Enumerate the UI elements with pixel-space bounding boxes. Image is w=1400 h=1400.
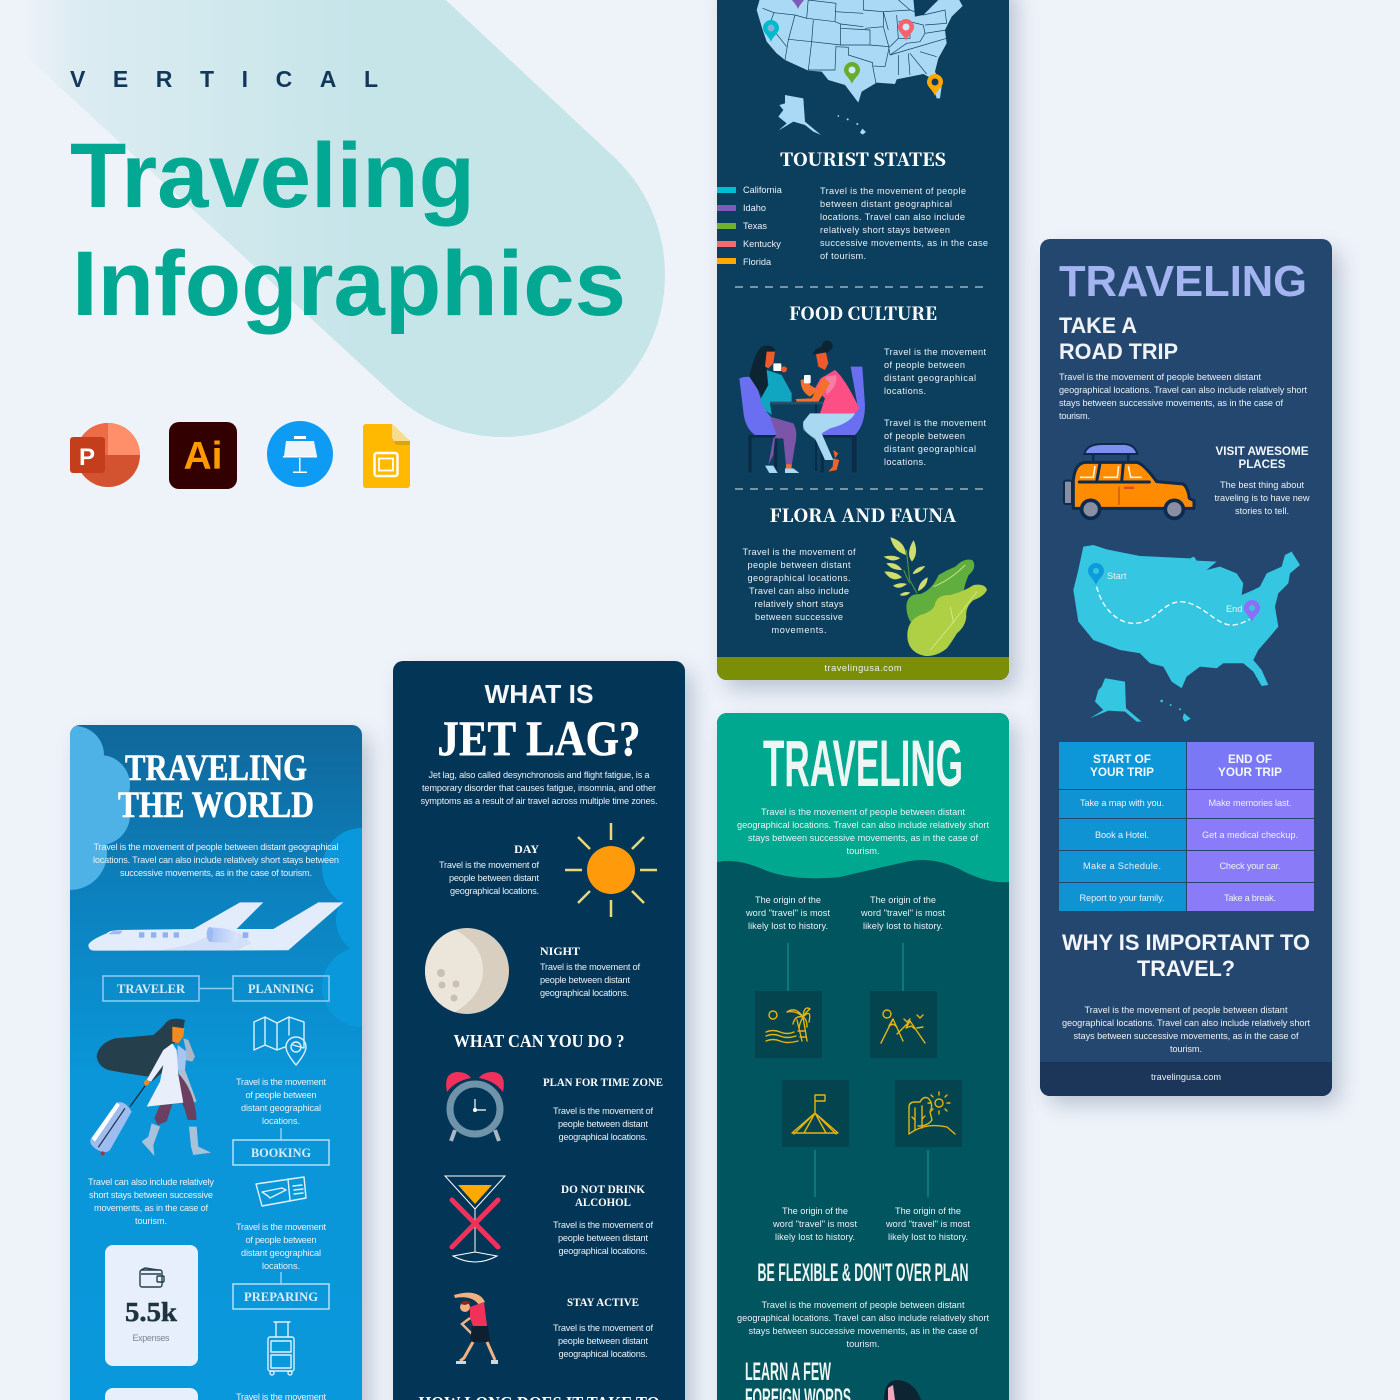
eyebrow: VERTICAL: VERTICAL <box>70 66 378 92</box>
table: start and end of your trip: Check your car. <box>1220 861 1280 871</box>
text: stay active: Travel is the movement of <box>553 1323 653 1333</box>
text: origin top left: likely lost to history. <box>748 921 828 931</box>
text: plan for time zone: PLAN FOR TIME ZONE <box>543 1077 663 1089</box>
text: visit paragraph <box>1214 482 1310 514</box>
text: tourist paragraph: of tourism. <box>820 251 866 261</box>
flow chart boxes: TRAVELER <box>117 981 186 996</box>
text: be flexible paragraph: Travel is the movement of people between distant <box>762 1300 965 1310</box>
table: start and end of your trip: Report to your family. <box>1080 893 1164 903</box>
flow box: preparing: PREPARING <box>244 1289 318 1304</box>
footer bar <box>1040 1062 1332 1096</box>
text: intro paragraph: temporary disorder that causes fatigue, insomnia, and other <box>422 783 656 793</box>
subheading: visit awesome places <box>1216 446 1308 468</box>
table: start and end of your trip: Take a break. <box>1224 893 1276 903</box>
heading: learn a few foreign words <box>745 1358 851 1400</box>
text: plan for time zone: Travel is the movement of <box>553 1106 653 1116</box>
flow box: preparing <box>233 1284 329 1309</box>
table: start and end of your trip: Take a map with you. <box>1080 798 1164 808</box>
text: origin bottom left <box>772 1206 857 1242</box>
text: intro paragraph: tourism. <box>1059 411 1090 421</box>
legend: states: California <box>743 185 783 195</box>
text: stay active: geographical locations. <box>558 1349 648 1359</box>
text: tourist paragraph: successive movements, as in the case <box>820 238 988 248</box>
table: start and end of your trip: START OF <box>1093 754 1151 766</box>
icon: tree and sun <box>895 1080 962 1147</box>
flow chart boxes <box>103 976 329 1001</box>
text: intro paragraph: Jet lag, also called desynchronosis and flight fatigue, is a <box>428 770 650 780</box>
illustration: orange car <box>1064 444 1194 518</box>
text: right column first paragraph: Travel is the movement <box>236 1077 326 1087</box>
heading: what can you do: WHAT CAN YOU DO ? <box>454 1031 624 1051</box>
text: intro paragraph: geographical locations. Travel can also include relatively short <box>737 820 989 830</box>
subheading: take a road trip: TAKE A <box>1059 313 1137 338</box>
text: do not drink alcohol <box>553 1184 653 1256</box>
text: booking paragraph: of people between <box>246 1235 316 1245</box>
text: flora paragraph: geographical locations. <box>748 573 850 583</box>
text: tourist paragraph: between distant geographical <box>820 199 952 209</box>
text: day <box>439 842 539 896</box>
text: intro paragraph <box>1059 372 1307 421</box>
icon: Google Slides <box>363 424 410 488</box>
flow box: booking: BOOKING <box>251 1145 311 1160</box>
table: start and end of your trip: Get a medical checkup. <box>1202 830 1298 840</box>
USA route map: End <box>1226 604 1242 614</box>
icon: Illustrator: Ai <box>184 435 222 478</box>
table: start and end of your trip: YOUR TRIP <box>1090 767 1154 779</box>
text: origin top right <box>860 895 945 931</box>
legend: states: Texas <box>743 221 767 231</box>
text: be flexible paragraph: tourism. <box>846 1339 880 1349</box>
text: food paragraphs <box>884 347 986 467</box>
text: food paragraphs: locations. <box>884 386 926 396</box>
panel: teal traveling card <box>717 713 1017 1400</box>
text: food paragraphs: Travel is the movement <box>884 347 986 357</box>
heading: flora and fauna: FLORA AND FAUNA <box>770 502 957 528</box>
table: start and end of your trip: YOUR TRIP <box>1218 767 1282 779</box>
text: stay active <box>553 1297 653 1359</box>
text: do not drink alcohol: ALCOHOL <box>575 1197 631 1209</box>
icon: crossed-out martini <box>445 1176 505 1262</box>
illustration: two women at a cafe table <box>739 341 865 473</box>
icon: moon <box>425 928 509 1014</box>
text: origin top left: word "travel" is most <box>745 908 830 918</box>
text: origin top right: likely lost to history. <box>863 921 943 931</box>
icon: alarm clock <box>446 1072 504 1141</box>
panel: jet lag card <box>393 661 693 1400</box>
text: food paragraphs: of people between <box>884 360 965 370</box>
icon: PowerPoint: P <box>79 444 95 471</box>
stat card: expenses <box>105 1245 198 1366</box>
stat card: second, cropped <box>105 1388 198 1400</box>
text: stay active: STAY ACTIVE <box>567 1297 639 1309</box>
legend: states: Kentucky <box>743 239 781 249</box>
text: origin bottom left: likely lost to history. <box>775 1232 855 1242</box>
heading: food culture: FOOD CULTURE <box>789 300 937 326</box>
text: intro paragraph: Travel is the movement of people between distant geographical <box>94 842 338 852</box>
text: flora paragraph: Travel is the movement of <box>742 547 856 557</box>
text: night: NIGHT <box>540 944 580 958</box>
subheading: take a road trip: ROAD TRIP <box>1059 339 1178 364</box>
text: be flexible paragraph <box>737 1300 989 1349</box>
text: left paragraph: short stays between successive <box>89 1190 213 1200</box>
text: flora paragraph: people between distant <box>748 560 851 570</box>
icon: mountains <box>870 991 937 1058</box>
icon: Illustrator <box>169 422 237 489</box>
heading: why is important to travel <box>1062 934 1310 976</box>
icon: sun <box>565 823 657 917</box>
icon: PowerPoint <box>70 423 140 487</box>
text: plan for time zone <box>543 1077 663 1142</box>
footer bar: travelingusa.com <box>824 663 902 673</box>
icon: suitcase <box>268 1322 294 1375</box>
text: be flexible paragraph: geographical locations. Travel can also include relatively short <box>737 1313 989 1323</box>
text: plan for time zone: people between distant <box>558 1119 648 1129</box>
table: start and end of your trip: Make a Schedule. <box>1083 861 1161 871</box>
text: day: people between distant <box>449 873 539 883</box>
text: origin bottom right: The origin of the <box>895 1206 961 1216</box>
text: origin bottom right: word "travel" is most <box>885 1219 970 1229</box>
text: do not drink alcohol: geographical locations. <box>558 1246 648 1256</box>
text: booking paragraph: locations. <box>262 1261 300 1271</box>
stat card: expenses: Expenses <box>132 1333 170 1343</box>
text: intro paragraph: stays between successive movements, as in the case of <box>748 833 978 843</box>
title <box>70 125 626 335</box>
text: left paragraph: Travel can also include relatively <box>88 1177 214 1187</box>
legend: states: Idaho <box>743 203 766 213</box>
illustration: woman head, cropped <box>884 1380 921 1400</box>
text: night: geographical locations. <box>540 988 629 998</box>
USA route map <box>1073 545 1300 722</box>
text: why paragraph: tourism. <box>1170 1044 1202 1054</box>
table: start and end of your trip: END OF <box>1228 754 1272 766</box>
text: why paragraph: geographical locations. Travel can also include relatively short <box>1062 1018 1310 1028</box>
text: day: geographical locations. <box>450 886 539 896</box>
legend: states: Florida <box>743 257 772 267</box>
text: booking paragraph: Travel is the movement <box>236 1222 326 1232</box>
text: day: Travel is the movement of <box>439 860 539 870</box>
text: why paragraph <box>1062 1005 1310 1054</box>
panel: tourist card <box>717 0 1017 690</box>
text: origin top right: The origin of the <box>870 895 936 905</box>
USA map with tourist pins <box>757 0 963 135</box>
text: food paragraphs: distant geographical <box>884 444 976 454</box>
icon: tent <box>782 1080 849 1147</box>
text: visit paragraph: traveling is to have new <box>1214 493 1310 503</box>
subheading: take a road trip <box>1059 318 1178 359</box>
text: right column first paragraph: locations. <box>262 1116 300 1126</box>
text: food paragraphs: locations. <box>884 457 926 467</box>
heading: traveling: TRAVELING <box>763 726 963 800</box>
text: right column first paragraph: distant geographical <box>241 1103 321 1113</box>
illustration: airplane <box>88 902 343 951</box>
heading: jet lag: JET LAG? <box>438 710 640 766</box>
panel: traveling the world card <box>68 725 380 1400</box>
panel: teal traveling card: BE FLEXIBLE & DON'T OVER PLAN <box>758 1259 968 1287</box>
heading: tourist states: TOURIST STATES <box>780 146 946 172</box>
text: left paragraph: tourism. <box>135 1216 167 1226</box>
text: intro paragraph <box>93 842 339 878</box>
text: visit paragraph: The best thing about <box>1220 480 1304 490</box>
text: intro paragraph: stays between successive movements, as in the case of <box>1059 398 1283 408</box>
text: origin top right: word "travel" is most <box>860 908 945 918</box>
heading: traveling the world: TRAVELING <box>125 748 307 789</box>
icon: plane ticket <box>256 1177 306 1206</box>
footer bar <box>717 657 1009 680</box>
text: why paragraph: Travel is the movement of people between distant <box>1084 1005 1288 1015</box>
text: booking paragraph <box>236 1222 326 1271</box>
USA route map: Start <box>1107 571 1127 581</box>
icon: folded map with pin <box>254 1017 306 1065</box>
text: day: DAY <box>514 842 539 856</box>
text: intro paragraph <box>420 770 658 806</box>
text: intro paragraph: Travel is the movement of people between distant <box>1059 372 1261 382</box>
text: do not drink alcohol: Travel is the movement of <box>553 1220 653 1230</box>
text: food paragraphs: Travel is the movement <box>884 418 986 428</box>
stat card: expenses: 5.5k <box>125 1297 177 1327</box>
text: night <box>540 944 640 998</box>
text: why paragraph: stays between successive movements, as in the case of <box>1074 1031 1299 1041</box>
decorative diagonal band <box>27 0 665 437</box>
text: origin bottom left: The origin of the <box>782 1206 848 1216</box>
text: left paragraph: movements, as in the case of <box>94 1203 208 1213</box>
footer bar: travelingusa.com <box>1151 1072 1221 1082</box>
text: tourist paragraph: relatively short stays between <box>820 225 950 235</box>
legend: states <box>717 185 783 267</box>
text: food paragraphs: distant geographical <box>884 373 976 383</box>
flow chart boxes: PLANNING <box>248 981 314 996</box>
text: intro paragraph: symptoms as a result of air travel across multiple time zones. <box>420 796 658 806</box>
text: flora paragraph: relatively short stays <box>754 599 844 609</box>
table: start and end of your trip: Book a Hotel. <box>1095 830 1149 840</box>
icon: Keynote <box>267 421 333 487</box>
subheading: visit awesome places: VISIT AWESOME <box>1216 444 1308 458</box>
text: flora paragraph: between successive <box>755 612 843 622</box>
text: flora paragraph: movements. <box>772 625 826 635</box>
text: tourist paragraph: locations. Travel can also include <box>820 212 965 222</box>
text: origin bottom left: word "travel" is most <box>772 1219 857 1229</box>
panel: road trip card <box>1040 239 1340 1105</box>
text: origin bottom right <box>885 1206 970 1242</box>
text: origin top left: The origin of the <box>755 895 821 905</box>
text: intro paragraph: Travel is the movement of people between distant <box>761 807 965 817</box>
table: start and end of your trip: Make memories last. <box>1208 798 1292 808</box>
heading: traveling: TRAVELING <box>1059 257 1307 306</box>
text: night: Travel is the movement of <box>540 962 640 972</box>
text: plan for time zone: geographical locations. <box>558 1132 648 1142</box>
icon: beach and palm <box>755 991 822 1058</box>
heading: why is important to travel: TRAVEL? <box>1137 956 1235 981</box>
text: visit paragraph: stories to tell. <box>1235 506 1289 516</box>
heading: why is important to travel: WHY IS IMPORTANT TO <box>1062 930 1310 955</box>
text: intro paragraph: successive movements, as in the case of tourism. <box>120 868 312 878</box>
text: right column first paragraph <box>236 1077 326 1126</box>
text: origin bottom right: likely lost to history. <box>888 1232 968 1242</box>
text: right column first paragraph: of people between <box>246 1090 316 1100</box>
heading: what is: WHAT IS <box>484 679 594 709</box>
text: do not drink alcohol: DO NOT DRINK <box>561 1184 645 1196</box>
heading: learn a few foreign words: LEARN A FEW <box>745 1358 831 1386</box>
text: flora paragraph <box>742 547 856 635</box>
text: tourist paragraph <box>820 186 988 261</box>
text: origin top left <box>745 895 830 931</box>
text: be flexible paragraph: stays between successive movements, as in the case of <box>748 1326 978 1336</box>
decorative clouds <box>70 726 362 1027</box>
text: intro paragraph: locations. Travel can also include relatively short stays between <box>93 855 339 865</box>
heading: traveling the world: THE WORLD <box>118 785 314 826</box>
text: do not drink alcohol: people between distant <box>558 1233 648 1243</box>
illustration: woman with suitcase <box>90 1019 211 1156</box>
title: Traveling <box>70 125 475 227</box>
text: booking paragraph: distant geographical <box>241 1248 321 1258</box>
text: stay active: people between distant <box>558 1336 648 1346</box>
text: food paragraphs: of people between <box>884 431 965 441</box>
text: left paragraph <box>88 1177 214 1226</box>
subheading: visit awesome places: PLACES <box>1238 457 1286 471</box>
flow box: booking <box>233 1140 329 1165</box>
illustration: plant <box>884 537 987 656</box>
text: tourist paragraph: Travel is the movement of people <box>820 186 966 196</box>
text: night: people between distant <box>540 975 630 985</box>
icon: person stretching <box>454 1293 498 1364</box>
text: intro paragraph <box>737 807 989 856</box>
text: intro paragraph: tourism. <box>846 846 880 856</box>
text: flora paragraph: Travel can also include <box>749 586 849 596</box>
text: intro paragraph: geographical locations. Travel can also include relatively short <box>1059 385 1307 395</box>
table: start and end of your trip <box>1059 742 1314 911</box>
title: Infographics <box>72 233 626 335</box>
heading: traveling the world <box>118 755 313 818</box>
